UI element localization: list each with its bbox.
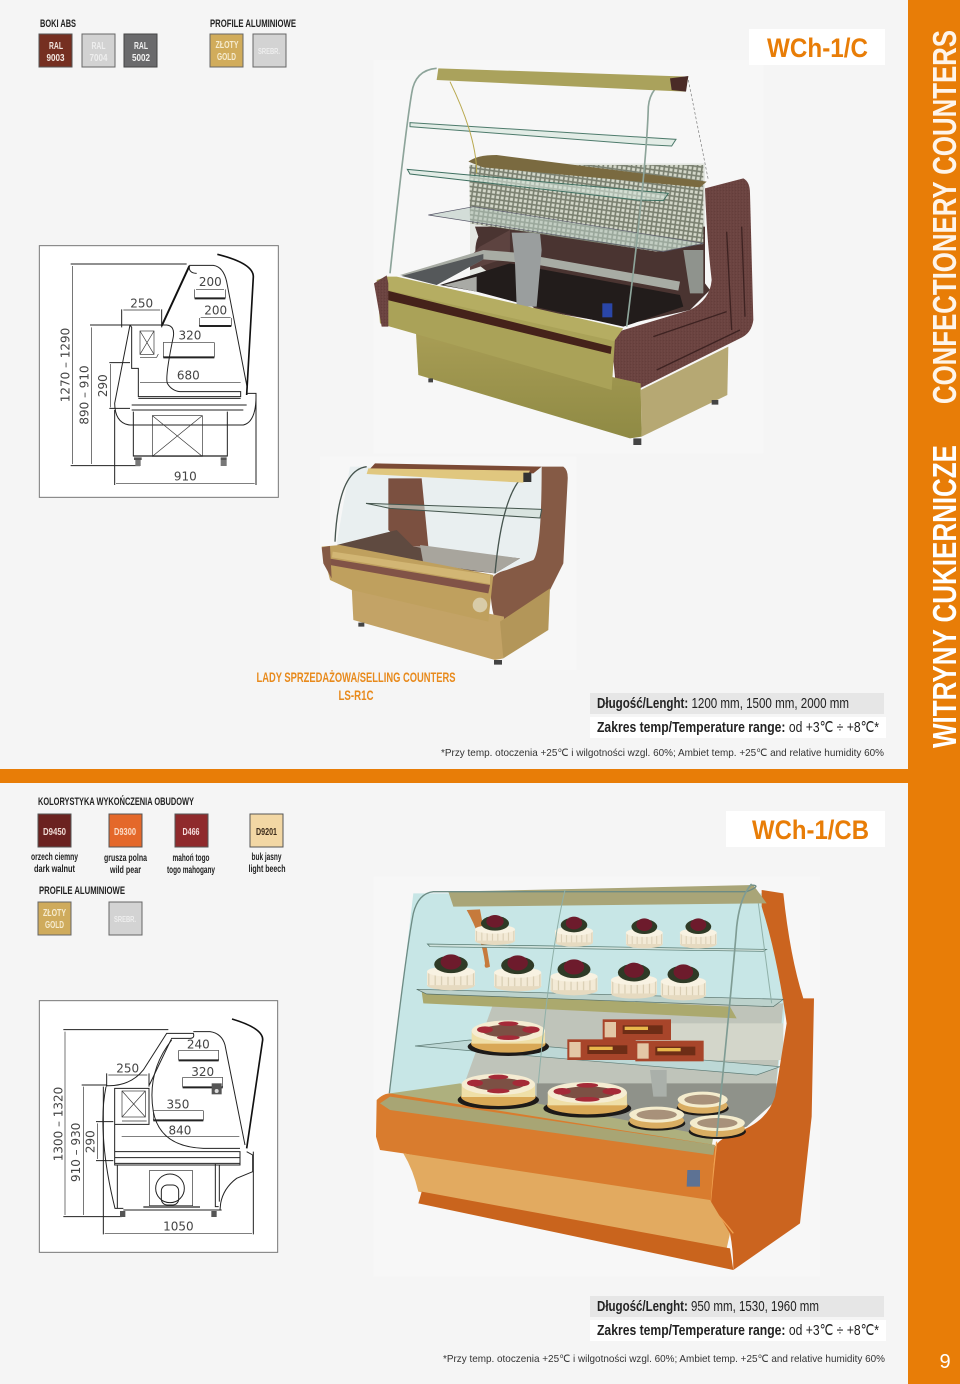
orange divider band [0,769,908,783]
glass front [389,885,756,1093]
technical drawing: WCh-1/CB: 910 – 930 [69,1123,83,1182]
swatch: gold: ZŁOTY [43,907,66,919]
shelf 1 [427,944,767,951]
technical drawing: WCh-1/C: 1270 – 1290 [59,328,73,402]
technical drawing: WCh-1/C: 200 [199,275,222,289]
panel: aluminium profiles top [210,18,296,67]
swatch: gold [210,34,243,67]
footnote top: *Przy temp. otoczenia +25℃ i wilgotności wzgl. 60%; Ambiet temp. +25℃ and relative humidity 60% [441,747,884,759]
swatch: D9300: grusza polna [104,852,147,864]
lower cakes [468,1020,549,1056]
logo [602,303,612,317]
base [352,587,504,660]
steel rails [400,250,680,291]
swatch: RAL 5002: RAL [134,40,148,52]
swatch: D9300: wild pear [109,864,141,876]
spec: length bottom: Długość/Lenght: 950 mm, 1530, 1960 mm [597,1298,819,1315]
swatch: D9450: orzech ciemny [31,851,78,863]
swatch: D9450: dark walnut [34,863,75,875]
swatch: gold: GOLD [45,919,64,931]
photo backdrop [373,60,763,453]
right side wood post [709,890,814,1270]
swatch: D466: D466 [182,826,200,838]
swatch: D9450 [31,814,78,875]
top canopy [437,68,688,92]
technical drawing: WCh-1/CB: 1300 – 1320 [52,1087,66,1161]
caption: selling counters: LADY SPRZEDAŻOWA/SELLING COUNTERS [256,669,456,685]
cake boxes [603,1019,671,1040]
back panel below mesh [475,227,710,325]
technical drawing: WCh-1/CB: 290 [84,1130,98,1153]
base [416,333,642,438]
glass front [335,467,530,573]
swatch: D9201: light beech [248,863,286,875]
top canopy [448,885,767,907]
swatch: RAL 5002: 5002 [132,52,150,64]
technical drawing: WCh-1/C: 200 [204,304,227,318]
swatch: RAL 9003: 9003 [46,52,65,64]
canopy [368,463,542,473]
technical drawing: WCh-1/C: 890 – 910 [78,365,92,425]
swatch: D466: togo mahogany [167,864,215,876]
model label WCh-1/C: WCh-1/C [767,33,868,63]
back wall [470,163,705,283]
technical drawing: WCh-1/CB: 1050 [163,1220,194,1234]
swatch: silver: SREBR. [258,47,280,56]
glass front [390,68,437,273]
caption: selling counters: LS-R1C [338,687,374,703]
swatch: gold: ZŁOTY [216,39,238,51]
spec: temperature bottom: Zakres temp/Temperature range: od +3℃ ÷ +8℃* [597,1322,879,1339]
panel: housing colours [31,795,286,876]
technical drawing: WCh-1/CB: 240 [187,1037,210,1051]
swatch: RAL 5002 [124,34,157,67]
front and base [376,1093,715,1210]
technical drawing: WCh-1/C: 250 [130,296,153,310]
spec: length top: Długość/Lenght: 1200 mm, 1500 mm, 2000 mm [597,695,849,712]
interior floor [440,263,683,327]
heading: kolorystyka: KOLORYSTYKA WYKOŃCZENIA OBUDOWY [38,795,194,808]
technical drawing: WCh-1/CB: 350 [167,1098,189,1112]
technical drawing: WCh-1/C: 320 [179,329,201,343]
swatch: D9300 [104,814,147,876]
panel: ABS side colours [39,18,157,67]
technical drawing: WCh-1/C: 290 [96,374,110,397]
swatch: RAL 7004: 7004 [90,52,108,64]
product photo: WCh-1/CB with cakes [373,877,820,1277]
shelf 2 and light bar [422,992,737,1018]
heading: profile aluminiowe: PROFILE ALUMINIOWE [39,885,125,897]
technical drawing: WCh-1/CB: 250 [116,1062,139,1076]
interior back [390,893,787,1137]
logo [687,1170,700,1187]
technical drawing: WCh-1/CB: 840 [169,1123,191,1137]
swatch: D9450: D9450 [43,826,66,838]
front rail [377,277,615,390]
swatch: D9300: D9300 [114,826,136,838]
swatch: D9201: buk jasny [252,851,282,863]
panel: aluminium profiles bottom [38,885,142,935]
swatch: D466 [167,814,215,876]
perforated mesh [469,165,703,252]
orange side bar [908,0,960,1384]
top row cakes [475,915,515,945]
photo backdrop [373,877,820,1277]
swatch: RAL 7004 [82,34,115,67]
product photo: LS-R1C selling counter [320,457,577,670]
model label WCh-1/CB [726,811,885,847]
technical drawing: WCh-1/C: 910 [174,470,197,484]
model label WCh-1/C [749,29,885,65]
brown side panel [612,178,753,391]
swatch: silver: SREBR. [114,915,136,924]
swatch: D9201: D9201 [256,826,277,838]
model label WCh-1/CB: WCh-1/CB [752,815,869,845]
photo backdrop [320,457,577,670]
technical drawing: WCh-1/CB: 320 [191,1065,214,1079]
front rail [322,545,493,622]
swatch: RAL 9003 [39,34,72,67]
footnote bottom: *Przy temp. otoczenia +25℃ i wilgotności wzgl. 60%; Ambiet temp. +25℃ and relative humidity 60% [443,1353,885,1365]
technical drawing: WCh-1/C: 680 [177,368,200,382]
brown side [490,467,568,623]
heading: profile aluminiowe: PROFILE ALUMINIOWE [210,18,296,30]
swatch: gold: GOLD [217,51,236,63]
swatch: RAL 7004: RAL [92,40,106,52]
technical drawing: WCh-1/C [39,246,278,497]
swatch: RAL 9003: RAL [49,40,63,52]
second row cakes [427,954,475,990]
technical drawing: WCh-1/CB [39,1001,278,1252]
heading: boki abs: BOKI ABS [40,18,76,30]
product photo: WCh-1/C display case [373,60,763,453]
swatch: gold [38,902,71,935]
spec: temperature top: Zakres temp/Temperature range: od +3℃ ÷ +8℃* [597,719,879,736]
swatch: D9201 [248,814,286,875]
glass shelves [410,123,676,146]
page number: 9 [939,1351,951,1373]
caption: selling counters [256,669,456,703]
swatch: D466: mahoń togo [172,852,210,864]
shelf 3 [415,1040,780,1075]
glass shelf [366,503,542,518]
